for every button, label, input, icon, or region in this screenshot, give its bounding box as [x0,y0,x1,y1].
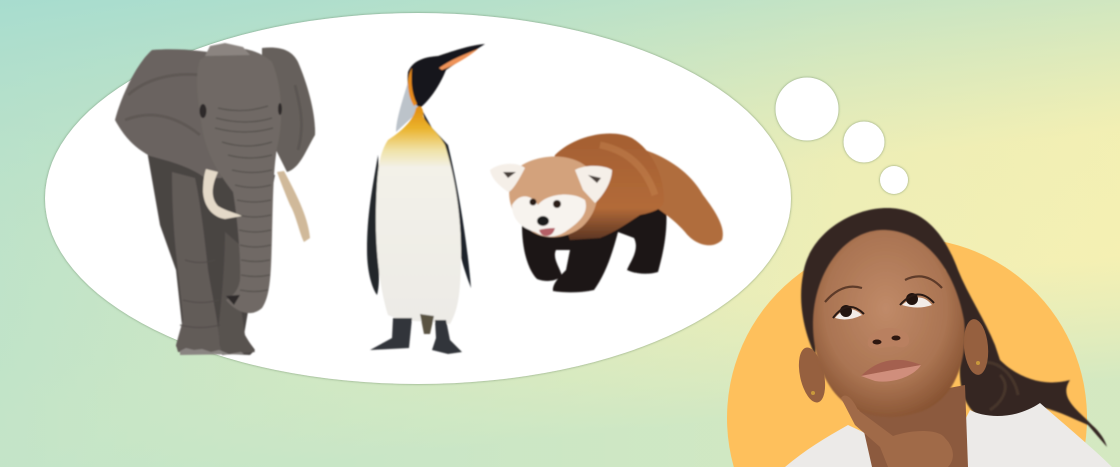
girl face [813,230,965,417]
girl hair and curls [801,208,1107,447]
girl earrings [811,361,980,395]
red panda body [548,133,664,240]
girl nostrils [872,336,900,344]
girl lips [861,360,921,382]
orange circle behind girl [727,238,1087,467]
elephant trunk wrinkles [180,106,273,328]
girl eyebrows [825,276,942,302]
red panda legs [522,200,667,292]
elephant ears [115,49,228,178]
elephant head and trunk [197,48,281,313]
red panda eyes nose mouth [530,198,561,236]
red panda head [509,156,598,237]
thought bubble: small circles [776,78,908,194]
girl eyes [833,293,934,319]
penguin feet [370,318,462,354]
red panda ear markings [503,172,601,183]
girl hand [841,395,953,467]
red panda ears [490,164,612,203]
penguin back and flippers [367,155,381,295]
girl ears [794,318,990,405]
penguin belly [376,106,461,324]
elephant eyes and trunk tip [200,103,282,305]
elephant tusks [203,169,242,219]
penguin head and beak [408,44,485,108]
penguin neck grey [396,82,420,132]
girl [785,208,1112,467]
thought bubble: large ellipse [45,13,791,384]
elephant [115,43,315,355]
elephant body and legs [146,145,275,355]
red panda [490,133,723,292]
girl neck [858,385,968,467]
elephant ear shading [125,74,301,150]
red panda tail [640,150,723,245]
king penguin [367,44,485,354]
girl nose [868,328,909,349]
red panda face white [512,195,586,236]
girl shirt [785,403,1112,467]
